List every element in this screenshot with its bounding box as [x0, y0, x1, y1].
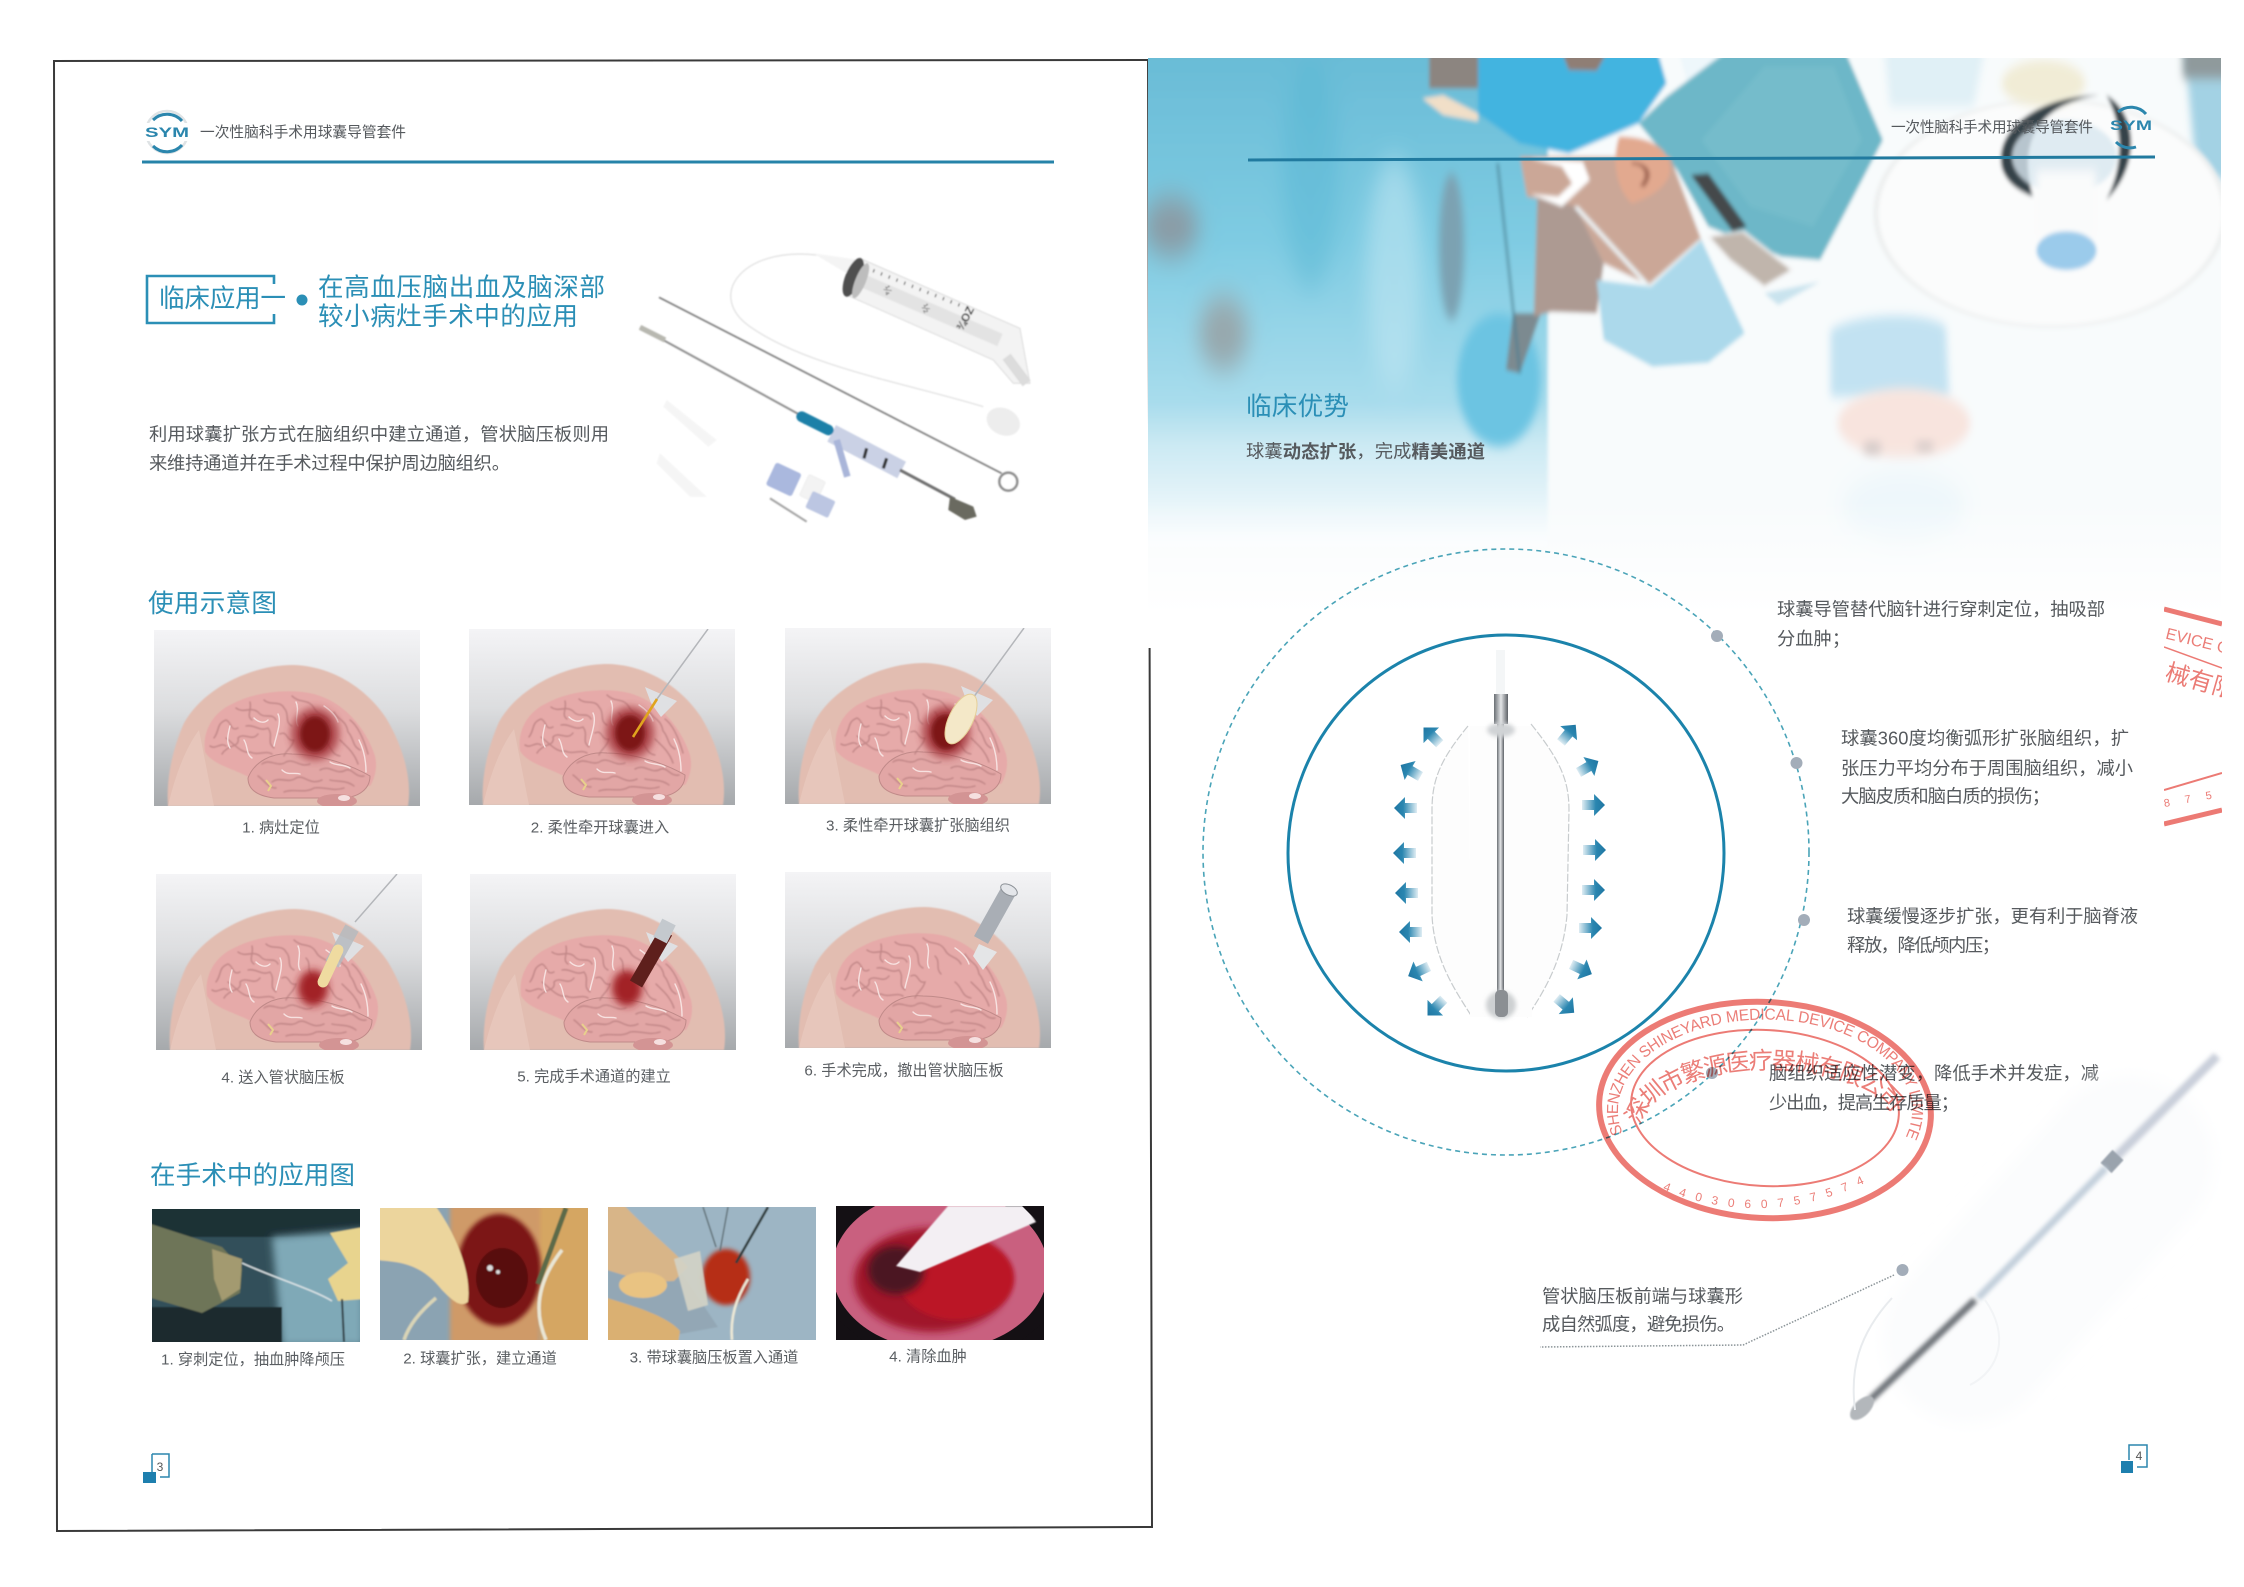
advantage text 1: 分血肿；	[1777, 628, 1850, 649]
advantage text 1: 球囊导管替代脑针进行穿刺定位，抽吸部	[1777, 598, 2105, 620]
surgery caption 1: 1. 穿刺定位，抽血肿降颅压	[161, 1352, 345, 1368]
caption 6: 6. 手术完成，撤出管状脑压板	[804, 1062, 1004, 1080]
red company stamp	[1596, 998, 1934, 1222]
red company stamp: 4403060757574	[1664, 1176, 1864, 1208]
brain diagram 2	[469, 629, 735, 836]
product photo: catheter kit: ¼	[880, 284, 895, 297]
section tag: clinical application one: 临床应用一	[159, 284, 286, 313]
panel: left page frame	[54, 60, 1152, 1531]
product photo: catheter kit: ¾OZ	[955, 305, 977, 333]
header: left logo	[144, 111, 190, 153]
caption 3: 3. 柔性牵开球囊扩张脑组织	[826, 818, 1010, 834]
section title	[318, 273, 605, 331]
advantage text 2: 大脑皮质和脑白质的损伤；	[1841, 786, 2050, 806]
page number 4	[2121, 1445, 2147, 1473]
advantage text 4: 少出血，提高生存质量；	[1769, 1092, 1959, 1113]
heading: clinical advantages: 临床优势	[1246, 392, 1349, 421]
intro paragraph	[149, 424, 609, 474]
advantage text 2: 张压力平均分布于周围脑组织，减小	[1841, 758, 2133, 778]
caption 1: 1. 病灶定位	[242, 820, 320, 836]
catheter tip illustration	[1846, 1040, 2244, 1459]
caption 4: 4. 送入管状脑压板	[221, 1068, 345, 1086]
page number 3: 3	[157, 1460, 164, 1474]
red stamp fragment at the right edge: EVICE C	[2164, 626, 2230, 658]
brain diagram 5	[470, 874, 736, 1086]
panel: right page background photo	[1148, 58, 2221, 648]
advantage text 4	[1769, 1062, 2099, 1113]
panel: right page content	[1203, 107, 2244, 1473]
surgery photo 2	[376, 1204, 592, 1368]
red company stamp: SHENZHEN SHINEYARD MEDICAL DEVICE COMPANY LIMITED	[1606, 1008, 1924, 1140]
red company stamp: 深圳市繁源医疗器械有限公司	[1623, 1048, 1905, 1124]
callout: tube tip	[1540, 1264, 1908, 1347]
brain diagram 3	[785, 628, 1051, 834]
red stamp fragment at the right edge: 8 7 5 7	[2163, 785, 2240, 810]
red stamp fragment at the right edge	[2164, 606, 2222, 826]
diagram: balloon expansion circles	[1203, 549, 1810, 1155]
advantage text 2	[1841, 728, 2133, 806]
advantage text 3	[1847, 906, 2138, 956]
section title: 较小病灶手术中的应用	[318, 302, 578, 331]
heading: usage diagram: 使用示意图	[148, 589, 277, 618]
surgery caption 2: 2. 球囊扩张，建立通道	[403, 1350, 557, 1368]
surgery photo 3	[604, 1203, 820, 1366]
brain diagram 6	[785, 872, 1051, 1080]
header: right logo: SYM	[2110, 117, 2152, 133]
header: left logo: SYM	[145, 124, 189, 140]
product photo: catheter kit: ½	[918, 303, 932, 315]
header: left product name: 一次性脑科手术用球囊导管套件	[200, 124, 406, 141]
advantage text 3: 球囊缓慢逐步扩张，更有利于脑脊液	[1847, 906, 2138, 926]
advantage text 4: 脑组织适应性潜变，降低手术并发症，减	[1769, 1062, 2099, 1084]
callout: tube tip: 管状脑压板前端与球囊形	[1542, 1286, 1743, 1306]
section tag: clinical application one	[147, 276, 308, 323]
surgery caption 3: 3. 带球囊脑压板置入通道	[630, 1348, 798, 1366]
brain diagram 1	[154, 630, 420, 836]
product photo: catheter kit	[640, 253, 1030, 522]
surgery caption 4: 4. 清除血肿	[889, 1348, 967, 1366]
section title: 在高血压脑出血及脑深部	[318, 273, 605, 302]
intro paragraph: 来维持通道并在手术过程中保护周边脑组织。	[149, 452, 510, 474]
callout dots	[1706, 630, 1810, 1079]
callout: tube tip: 成自然弧度，避免损伤。	[1542, 1314, 1735, 1334]
advantage text 3: 释放，降低颅内压；	[1847, 934, 2000, 956]
balloon catheter	[1432, 650, 1569, 1019]
surgery photo 1	[148, 1205, 364, 1368]
red stamp fragment at the right edge: 械有限	[2162, 659, 2239, 705]
caption 5: 5. 完成手术通道的建立	[517, 1068, 671, 1086]
advantage text 2: 球囊360度均衡弧形扩张脑组织，扩	[1841, 728, 2129, 748]
page number 3	[143, 1454, 169, 1483]
intro paragraph: 利用球囊扩张方式在脑组织中建立通道，管状脑压板则用	[149, 424, 609, 444]
brain diagram 4	[156, 874, 422, 1086]
header: right product name: 一次性脑科手术用球囊导管套件	[1891, 119, 2093, 136]
advantage text 1	[1777, 598, 2105, 649]
surgery photo 4	[832, 1190, 1048, 1366]
subheading: 球囊动态扩张，完成精美通道	[1246, 440, 1485, 462]
header: right logo	[2110, 107, 2152, 148]
heading: surgical application: 在手术中的应用图	[150, 1161, 355, 1190]
expansion arrows	[1393, 718, 1606, 1023]
page number 4: 4	[2136, 1449, 2143, 1463]
caption 2: 2. 柔性牵开球囊进入	[531, 820, 669, 836]
